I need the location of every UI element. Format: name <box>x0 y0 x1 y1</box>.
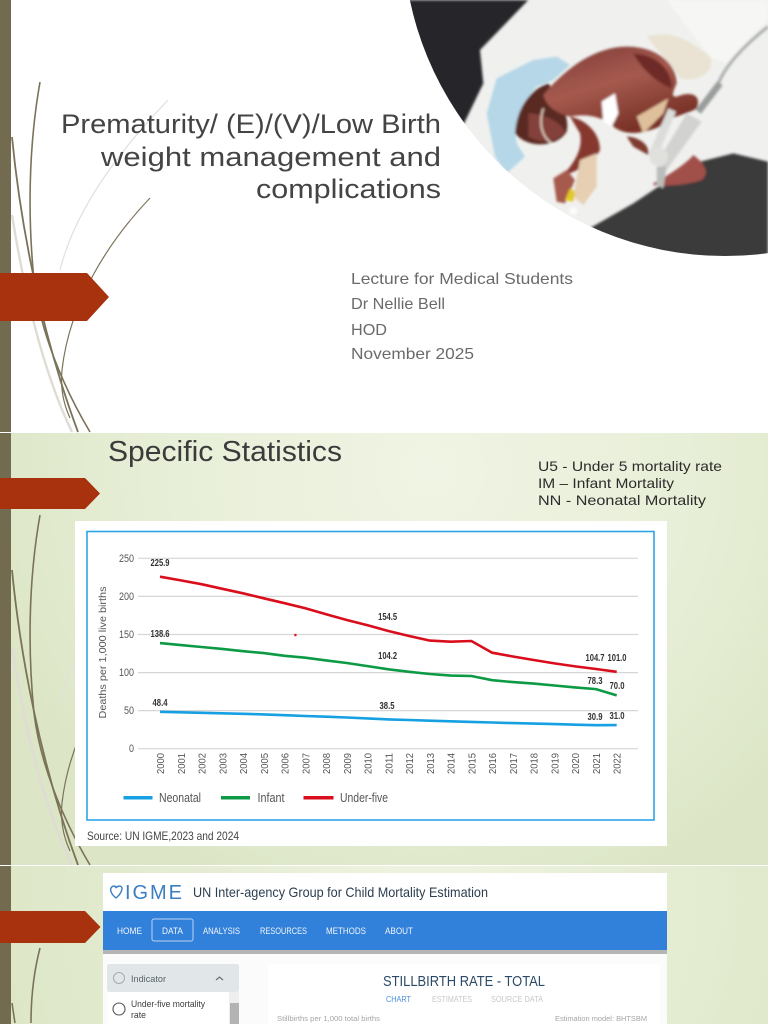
stillbirth chart card <box>268 964 660 1024</box>
stillbirth chart card: CHART <box>386 994 411 1004</box>
panel: IGME website screenshot <box>103 873 667 1024</box>
x axis years: 2007 <box>301 753 312 774</box>
slide 3 decorative grass strokes <box>12 948 40 1023</box>
infant line <box>160 643 617 695</box>
left olive band <box>0 0 11 1024</box>
data value labels: 104.2 <box>378 651 397 662</box>
photo: premature baby in circle <box>400 0 768 260</box>
x axis years: 2016 <box>488 753 499 774</box>
y axis numbers: 200 <box>119 591 134 603</box>
chart legend <box>124 790 388 805</box>
subtitle text block <box>351 271 573 363</box>
x axis years: 2006 <box>281 753 292 774</box>
x axis years: 2010 <box>364 753 375 774</box>
data value labels: 38.5 <box>380 701 395 712</box>
title: complications <box>256 174 441 204</box>
chart source: Source: UN IGME,2023 and 2024 <box>87 829 239 843</box>
slide 2 background <box>0 433 768 865</box>
data value labels <box>150 558 627 723</box>
subtitle text block: November 2025 <box>351 346 474 363</box>
slide 1 decorative grass strokes <box>12 82 168 432</box>
x axis years: 2021 <box>592 753 603 774</box>
y axis numbers: 150 <box>119 629 134 641</box>
subtitle text block: Dr Nellie Bell <box>351 296 445 313</box>
x axis years: 2011 <box>384 753 395 774</box>
data value labels: 225.9 <box>150 558 170 569</box>
data value labels: 154.5 <box>378 612 397 623</box>
navigation bar <box>103 911 667 954</box>
stillbirth chart card: Stillbirths per 1,000 total births <box>277 1016 381 1023</box>
under-five line <box>160 577 617 672</box>
x axis years: 2015 <box>467 753 478 774</box>
stillbirth chart card: Estimation model: BHTSBM <box>555 1016 647 1023</box>
chart legend: Infant <box>258 790 285 805</box>
site header: UN Inter-agency Group for Child Mortality Estimation <box>193 884 488 900</box>
data value labels: 48.4 <box>152 698 168 709</box>
site header: IGME <box>125 882 182 904</box>
x axis years: 2000 <box>156 753 167 774</box>
data value labels: 101.0 <box>608 653 627 664</box>
data value labels: 31.0 <box>610 711 625 722</box>
x axis years: 2020 <box>571 753 582 774</box>
title <box>61 109 441 204</box>
stillbirth chart card: ESTIMATES <box>432 994 472 1004</box>
slide 2 decorative grass strokes <box>12 515 168 865</box>
abbreviations key <box>538 458 722 508</box>
slide 1 background <box>0 0 768 432</box>
panel: mortality line chart <box>75 521 667 846</box>
abbreviations key: NN - Neonatal Mortality <box>538 492 706 508</box>
x axis years: 2013 <box>426 753 437 774</box>
stillbirth chart card: STILLBIRTH RATE - TOTAL <box>383 973 545 990</box>
slide 2 red arrow tab <box>0 478 100 509</box>
x axis years: 2009 <box>343 753 354 774</box>
x axis years: 2005 <box>260 753 271 774</box>
subtitle text block: Lecture for Medical Students <box>351 271 573 288</box>
neonatal line <box>160 712 617 725</box>
navigation bar: ABOUT <box>385 926 413 937</box>
slide 1 red arrow tab <box>0 273 109 321</box>
data value labels: 78.3 <box>588 676 603 687</box>
chart legend: Neonatal <box>159 790 201 805</box>
indicator sidebar: Under-five mortality <box>131 999 205 1010</box>
x axis years: 2014 <box>447 753 458 774</box>
indicator sidebar: rate <box>131 1010 146 1021</box>
x axis years: 2004 <box>239 753 250 774</box>
x axis years: 2001 <box>177 753 188 774</box>
x axis years: 2008 <box>322 753 333 774</box>
y axis numbers: 100 <box>119 667 134 679</box>
stray red dot <box>294 634 297 636</box>
y axis numbers: 250 <box>119 553 134 565</box>
x axis years <box>156 753 624 774</box>
x axis years: 2018 <box>530 753 541 774</box>
slide 3 background <box>0 866 768 1024</box>
indicator sidebar: Indicator <box>131 974 166 985</box>
navigation bar: RESOURCES <box>260 926 307 937</box>
slide 3 red arrow tab <box>0 911 100 943</box>
x axis years: 2022 <box>613 753 624 774</box>
title: weight management and <box>100 142 441 172</box>
chart legend: Under-five <box>340 790 388 805</box>
y axis title: Deaths per 1,000 live births <box>98 586 109 718</box>
data value labels: 70.0 <box>610 681 625 692</box>
navigation bar: METHODS <box>326 926 366 937</box>
navigation bar: ANALYSIS <box>203 926 240 937</box>
subtitle text block: HOD <box>351 322 387 339</box>
x axis years: 2003 <box>218 753 229 774</box>
site header <box>103 873 667 911</box>
heading: Specific Statistics: Specific Statistics <box>108 436 342 468</box>
abbreviations key: U5 - Under 5 mortality rate <box>538 458 722 474</box>
stillbirth chart card: SOURCE DATA <box>491 994 543 1004</box>
y axis numbers: 0 <box>129 743 134 755</box>
y axis numbers <box>119 553 134 755</box>
x axis years: 2019 <box>550 753 561 774</box>
x axis years: 2017 <box>509 753 520 774</box>
data value labels: 138.6 <box>150 629 170 640</box>
y axis numbers: 50 <box>124 705 134 717</box>
data value labels: 104.7 <box>586 653 605 664</box>
navigation bar: DATA <box>162 926 184 937</box>
x axis years: 2002 <box>198 753 208 774</box>
data value labels: 30.9 <box>588 712 603 723</box>
abbreviations key: IM – Infant Mortality <box>538 475 674 491</box>
indicator sidebar <box>107 964 239 1024</box>
x axis years: 2012 <box>405 753 416 774</box>
navigation bar: HOME <box>117 926 142 937</box>
title: Prematurity/ (E)/(V)/Low Birth <box>61 109 441 139</box>
